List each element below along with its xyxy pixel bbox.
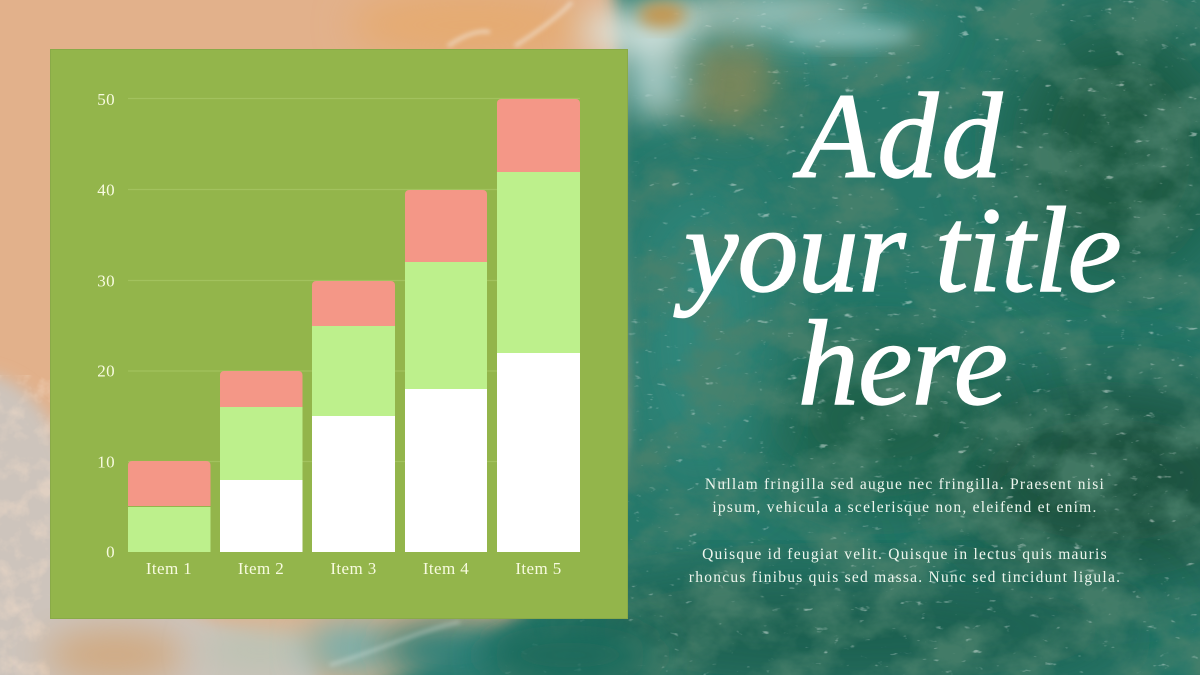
- y axis labels: 10: [97, 452, 115, 472]
- brown shallow patch: [682, 43, 778, 127]
- bar: Item 5: [497, 99, 580, 552]
- y axis labels: [97, 90, 115, 562]
- bar: Item 1: [128, 461, 210, 552]
- y axis labels: 50: [97, 90, 115, 109]
- bar: Item 4: [405, 190, 487, 552]
- x axis labels: Item 4: [423, 559, 469, 578]
- body text: rhoncus finibus quis sed massa. Nunc sed tincidunt ligula.: [689, 569, 1121, 586]
- body text: ipsum, vehicula a scelerisque non, eleifend et enim.: [712, 499, 1098, 516]
- body text: [689, 476, 1121, 586]
- x axis labels: [146, 559, 562, 578]
- body text: Nullam fringilla sed augue nec fringilla. Praesent nisi: [705, 476, 1105, 493]
- chart gridlines: [128, 98, 580, 462]
- foam: top waves: [580, 0, 870, 117]
- bar: Item 2: [220, 371, 302, 552]
- title: here: [798, 296, 1007, 431]
- y axis labels: 20: [97, 362, 115, 380]
- title: [673, 69, 1121, 431]
- y axis labels: 0: [106, 542, 115, 562]
- water mottling and whitecaps: [504, 0, 1200, 675]
- x axis labels: Item 3: [330, 559, 377, 578]
- bar: Item 3: [312, 281, 395, 552]
- y axis labels: 40: [97, 180, 115, 200]
- panel: stacked bar chart card: [50, 49, 628, 619]
- y axis labels: 30: [97, 272, 115, 290]
- foam: lower left shore: [0, 372, 330, 675]
- title: your title: [684, 182, 1121, 318]
- title: Add: [800, 69, 1005, 204]
- body text: Quisque id feugiat velit. Quisque in lectus quis mauris: [702, 546, 1108, 563]
- x axis labels: Item 1: [146, 559, 192, 578]
- x axis labels: Item 5: [515, 559, 562, 578]
- water base: [320, 0, 1200, 675]
- x axis labels: Item 2: [238, 559, 284, 578]
